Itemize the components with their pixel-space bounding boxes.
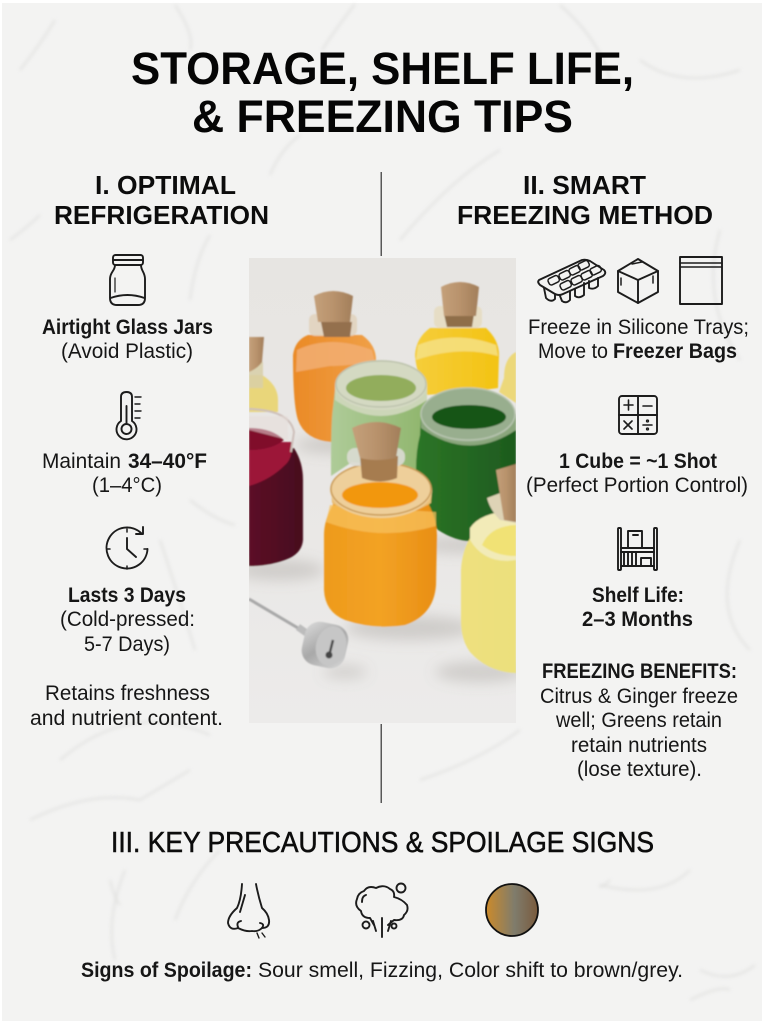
jar: front orange (324, 422, 437, 627)
heading: I. Optimal Refrigeration: REFRIGERATION (54, 200, 269, 230)
vertical divider (381, 172, 382, 803)
icon: fizzing cloud (356, 884, 408, 937)
heading: I. Optimal Refrigeration: I. OPTIMAL (95, 170, 236, 200)
jar: far left yellow (249, 337, 278, 412)
icon: thermometer (116, 392, 141, 439)
icon: freezer bag (680, 257, 722, 304)
text: freezing benefits: retain nutrients (571, 734, 707, 757)
photo: juice jars on marble (235, 258, 525, 723)
text: 1 cube = 1 shot: 1 Cube = ~1 Shot (559, 450, 717, 473)
jar: back orange (293, 291, 376, 442)
icon: glass jar (110, 255, 145, 305)
jar: back yellow (415, 282, 499, 395)
text: freezing benefits: well; Greens retain (555, 709, 722, 732)
icon: calculator grid (619, 396, 657, 434)
jar: far right yellow (499, 352, 516, 403)
text: maintain temperature (42, 450, 207, 497)
text: lasts 3 days: (Cold-pressed: (60, 608, 195, 631)
text: airtight glass jars: (Avoid Plastic) (61, 340, 193, 363)
title: STORAGE, SHELF LIFE, (131, 43, 634, 94)
icon: freezer shelf (618, 528, 657, 570)
text: shelf life: Shelf Life: (592, 584, 684, 607)
text: maintain temperature: Maintain (42, 450, 121, 473)
jar: light green (331, 360, 427, 476)
thermometer probe (249, 599, 351, 671)
text: signs of spoilage (81, 959, 683, 982)
text: freezing benefits (540, 660, 738, 781)
text: shelf life: 2–3 Months (582, 608, 693, 631)
jar: front right yellow (461, 464, 516, 673)
text: freeze in silicone trays: Freeze in Silicone Trays; (528, 316, 749, 339)
text: signs of spoilage: Signs of Spoilage: (81, 959, 252, 982)
text: airtight glass jars (42, 316, 213, 363)
heading: II. Smart Freezing Method: FREEZING METHOD (457, 200, 713, 230)
icon: clock (107, 527, 148, 569)
title: & FREEZING TIPS (192, 91, 573, 142)
icon: colour shift swatch (486, 884, 538, 936)
text: freeze in silicone trays: Freezer Bags (613, 340, 737, 363)
jar: dark green (416, 388, 516, 541)
text: retains freshness: Retains freshness (45, 682, 210, 705)
text: maintain temperature: (1–4°C) (92, 474, 162, 497)
text: freezing benefits: (lose texture). (577, 758, 702, 781)
icon: ice cube (618, 259, 658, 303)
text: freezing benefits: Citrus & Ginger freeze (540, 685, 738, 708)
text: maintain temperature: 34–40°F (128, 450, 207, 473)
text: shelf life (582, 584, 693, 631)
text: retains freshness: and nutrient content. (30, 707, 223, 730)
text: lasts 3 days: 5-7 Days) (84, 633, 170, 656)
icon: nose (228, 884, 269, 938)
text: lasts 3 days: Lasts 3 Days (68, 584, 186, 607)
icon: ice cube tray (538, 260, 605, 302)
jar: beetroot red (249, 409, 303, 566)
text: freeze in silicone trays: Move to (538, 340, 608, 363)
text: 1 cube = 1 shot: (Perfect Portion Control) (526, 474, 748, 497)
text: lasts 3 days (60, 584, 195, 656)
text: freezing benefits: FREEZING BENEFITS: (542, 660, 737, 683)
heading: I. Optimal Refrigeration (54, 170, 269, 230)
text: freeze in silicone trays (528, 316, 749, 363)
text: retains freshness (30, 682, 223, 730)
heading: III. Key Precautions & Spoilage Signs: III. KEY PRECAUTIONS & SPOILAGE SIGNS (111, 827, 654, 859)
text: airtight glass jars: Airtight Glass Jars (42, 316, 213, 339)
heading: II. Smart Freezing Method (457, 170, 713, 230)
text: 1 cube = 1 shot (526, 450, 748, 497)
heading: II. Smart Freezing Method: II. SMART (523, 170, 646, 200)
text: signs of spoilage: Sour smell, Fizzing, Color shift to brown/grey. (258, 959, 683, 982)
title (131, 43, 634, 142)
